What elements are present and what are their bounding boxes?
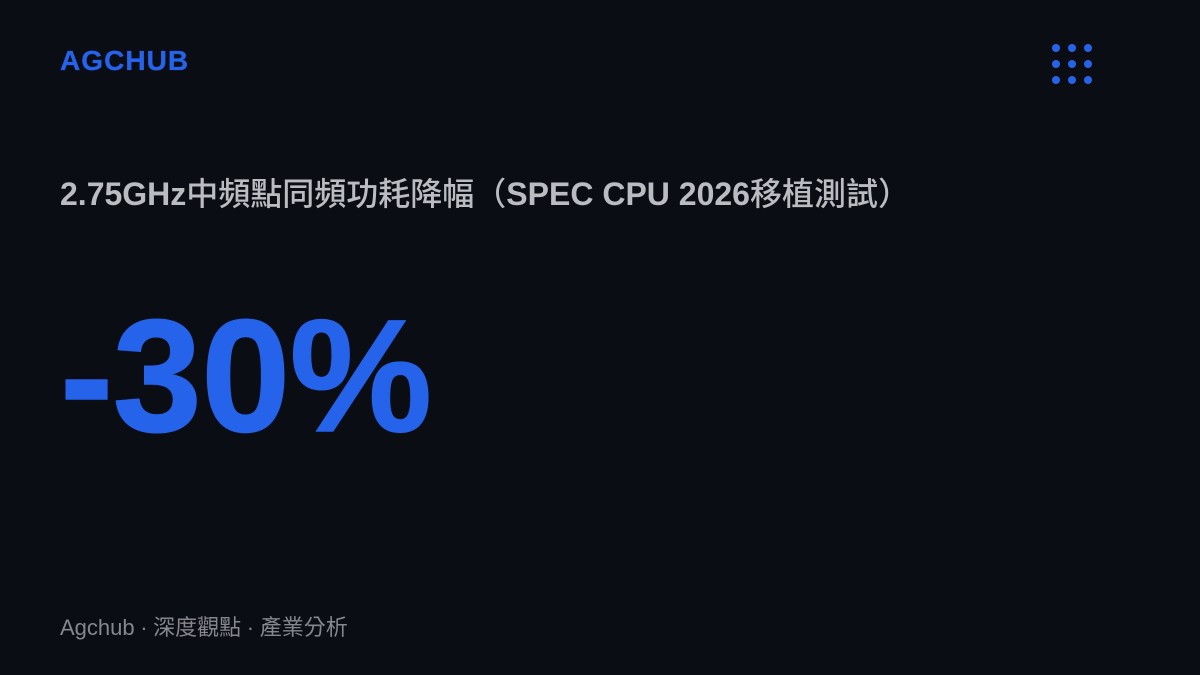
icon: dot grid: [1052, 44, 1092, 84]
big number: -30%: [60, 286, 432, 465]
brand logo text: AGCHUB: [60, 45, 189, 76]
metric heading: 2.75GHz中頻點同頻功耗降幅（SPEC CPU 2026移植測試）: [60, 176, 910, 212]
footer text: Agchub · 深度觀點 · 產業分析: [60, 615, 348, 640]
